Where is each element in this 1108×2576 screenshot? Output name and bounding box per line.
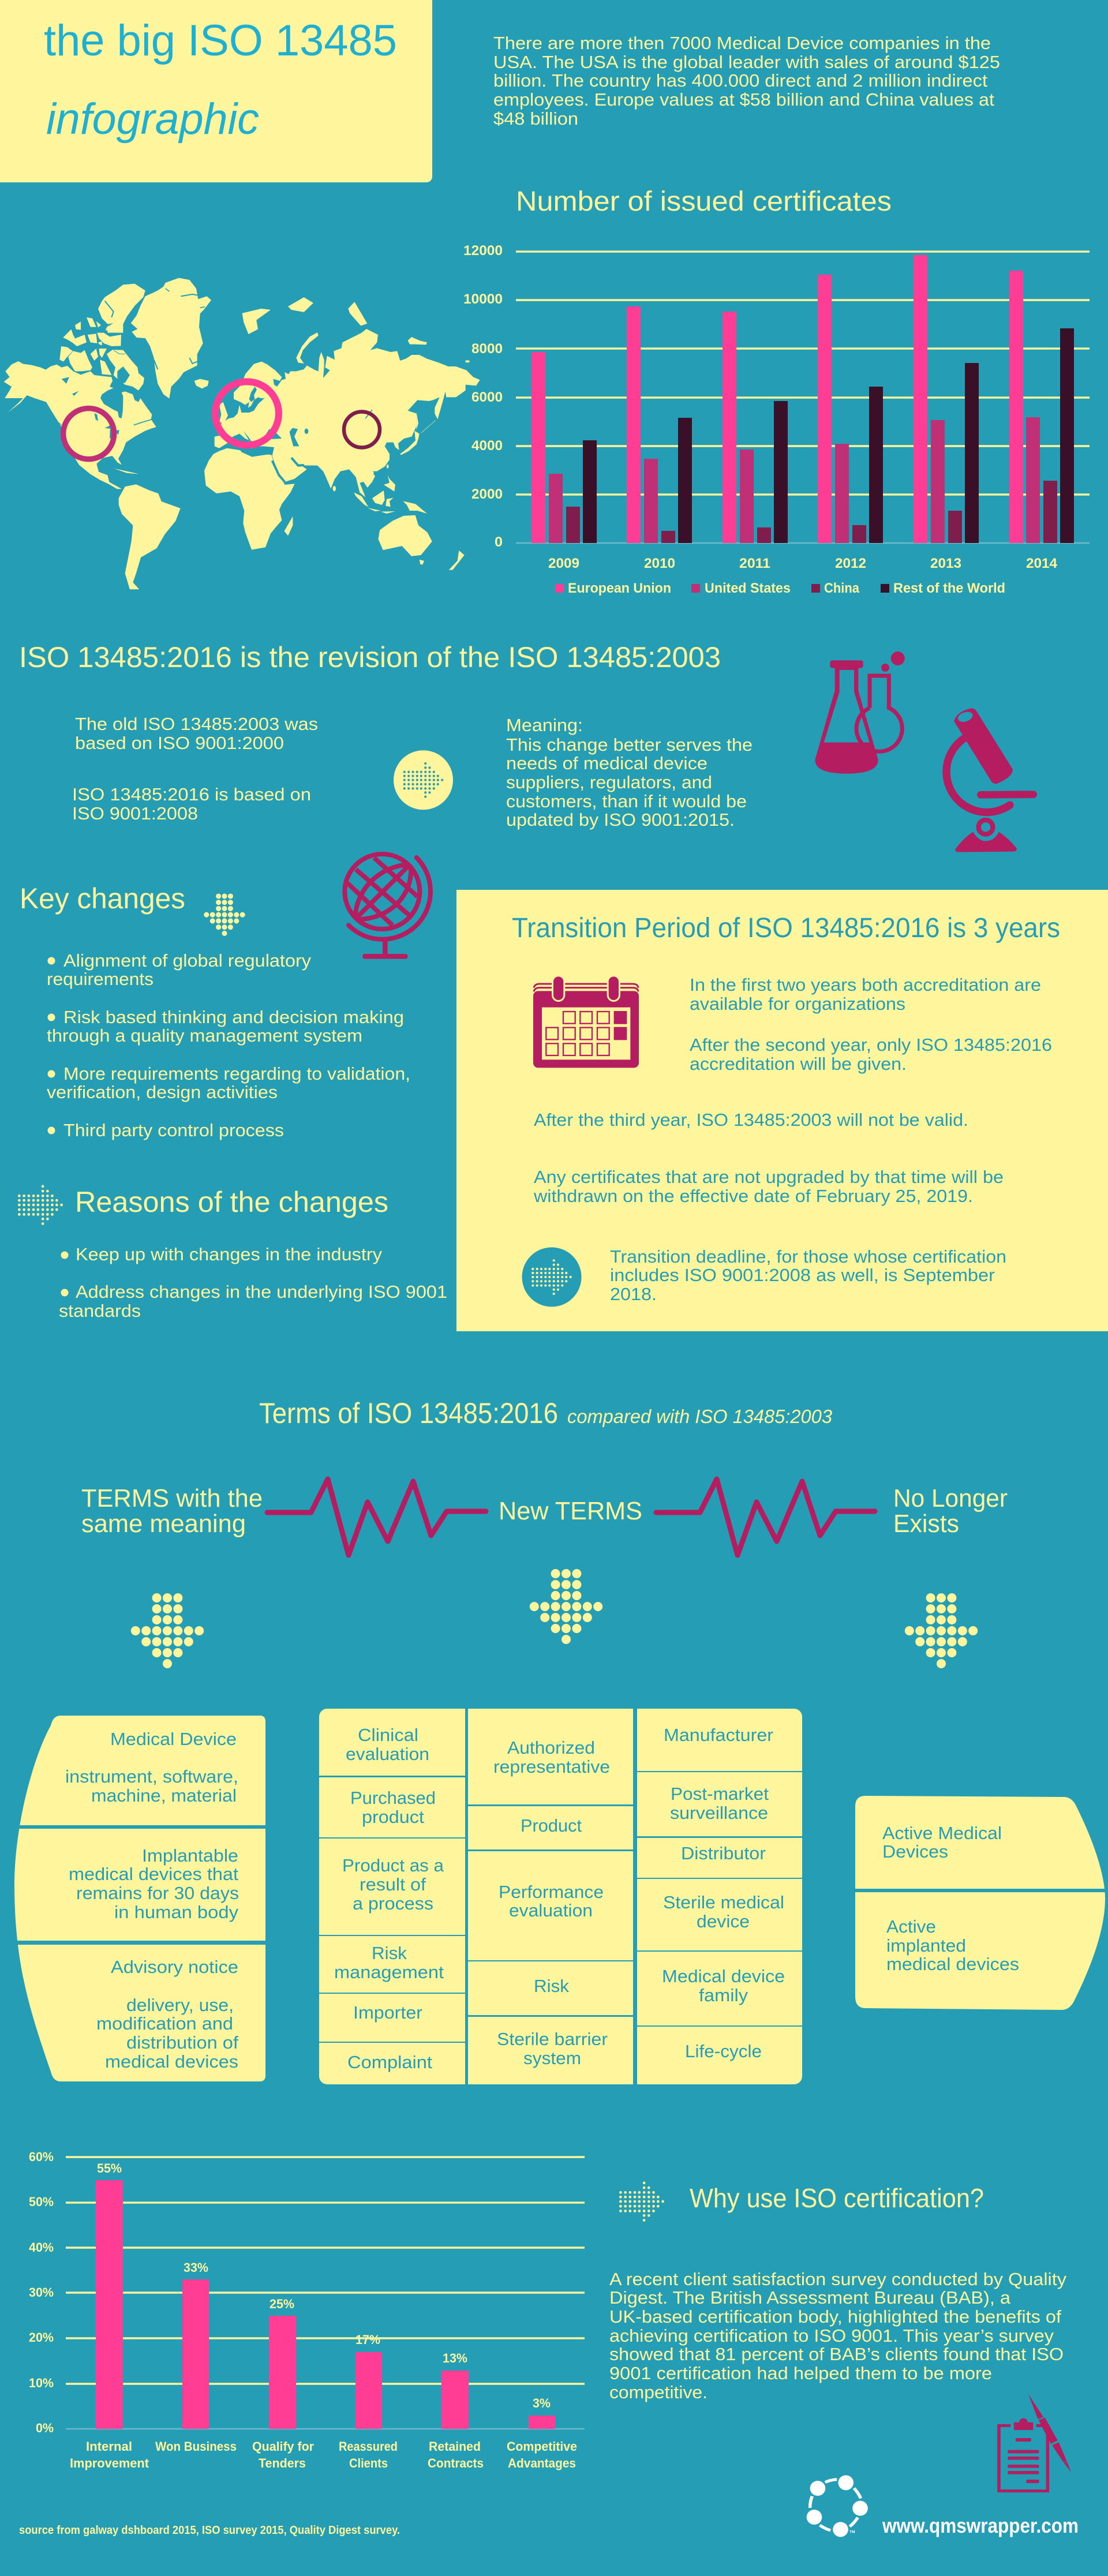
text: meaning: Meaning: [506,715,583,735]
column 1 terms: Importer [353,2002,422,2023]
column 2 terms: Product [521,1815,582,1836]
chart legend [555,581,1005,596]
column 1 terms: evaluation [346,1744,429,1764]
list: reasons [59,1244,447,1321]
bar chart: issued certificates: 2010 [644,556,675,571]
icon: dotted arrow left [131,1593,204,1668]
column 3 terms: surveillance [670,1803,768,1823]
bar chart: issued certificates: 4000 [471,438,503,454]
text: first two years: available for organizations [690,994,905,1014]
heading: revision: ISO 13485:2016 is the revision of the ISO 13485:2003 [19,641,721,673]
bar chart: why ISO certification: 13% [443,2351,467,2365]
bar chart: why ISO certification: 50% [29,2195,54,2209]
bar chart: issued certificates: 12000 [463,243,503,259]
icon: dotted right arrow [619,2182,664,2222]
bar chart: why ISO certification: Improvement [70,2456,149,2470]
panel: no longer exists terms: medical devices [886,1954,1019,1974]
panel: terms with same meaning [12,1716,268,2081]
label: terms with the same meaning: TERMS with the [81,1484,263,1512]
icon: right arrow in cream circle [394,750,453,810]
label: terms with the same meaning: same meaning [81,1510,246,1538]
bar chart: issued certificates: 0 [495,534,503,550]
bar chart: why ISO certification: 33% [184,2260,208,2275]
chart legend: Rest of the World [893,581,1005,596]
list: key changes: Alignment of global regulatory [63,950,312,971]
text: meaning: needs of medical device [506,753,708,773]
text: first two years: accreditation will be given. [690,1054,907,1074]
column 1 terms [334,1725,444,2072]
list: key changes: verification, design activities [47,1082,278,1102]
column 2 terms: Sterile barrier [497,2029,608,2049]
text: meaning [506,715,753,830]
label: no longer exists [893,1484,1008,1538]
panel: terms with same meaning: in human body [114,1902,239,1922]
column 3 terms: device [697,1911,750,1931]
bar chart: issued certificates: 8000 [471,341,503,357]
text: meaning: updated by ISO 9001:2015. [506,810,735,830]
column 2 terms: Authorized [507,1738,595,1758]
column 3 terms: Life-cycle [685,2041,762,2061]
bar chart: why ISO certification: Competitive [507,2439,577,2454]
icon: microscope [946,708,1034,852]
panel: no longer exists terms: Active [886,1916,936,1937]
bar chart: issued certificates: 10000 [463,291,503,307]
panel: no longer exists terms: Devices [882,1841,948,1862]
text: old standard: based on ISO 9001:2000 [75,733,284,753]
column 1 terms: a process [353,1893,433,1914]
chart legend: European Union [568,581,671,596]
heading: key changes: Key changes [20,882,185,915]
text: after third year: withdrawn on the effective date of February 25, 2019. [533,1186,973,1206]
panel: terms with same meaning: Implantable [142,1845,238,1866]
text: first two years: After the second year, only ISO 13485:2016 [690,1035,1052,1055]
list: key changes: through a quality management system [47,1025,362,1046]
bar chart: issued certificates: 2009 [548,556,579,571]
icon: dotted arrow middle [530,1569,602,1644]
intro paragraph: There are more then 7000 Medical Device companies in the [493,33,991,53]
heading: terms comparison: compared with ISO 13485:2003 [567,1406,833,1427]
column 1 terms: Product as a [342,1855,444,1875]
column 1 terms: result of [360,1874,426,1894]
bar chart: issued certificates: 2000 [471,486,503,502]
panel: terms with same meaning: remains for 30 days [76,1883,239,1903]
text: old standard [72,714,318,823]
text: transition deadline: Transition deadline, for those whose certification [610,1246,1006,1267]
icon: right arrow in teal circle [522,1248,582,1306]
text: survey paragraph: UK-based certification body, highlighted the benefits of [609,2307,1061,2327]
column 1 terms: Risk [372,1943,407,1963]
ring: European Union [215,381,279,445]
panel heading: Transition Period of ISO 13485:2016 is 3 years [512,913,1060,943]
bar chart: why ISO certification: 30% [29,2285,54,2300]
text: meaning: This change better serves the [506,735,753,755]
panel: terms with same meaning: medical devices [105,2051,238,2072]
world map [4,278,480,589]
label: no longer exists: Exists [893,1510,959,1538]
intro paragraph: employees. Europe values at $58 billion and China values at [493,89,994,110]
heading: terms comparison: Terms of ISO 13485:2016 [259,1397,558,1429]
bar chart: issued certificates: 2011 [739,556,770,571]
panel: terms with same meaning: medical devices that [69,1864,238,1884]
website url: www.qmswrapper.com [882,2514,1079,2537]
chart legend: United States [705,581,791,596]
label: terms with the same meaning [81,1484,263,1538]
bar chart: why ISO certification: 10% [29,2376,54,2390]
bar chart: issued certificates: 2014 [1026,556,1058,571]
pulse line left [267,1479,486,1555]
panel: terms with same meaning: modification and [96,2013,233,2034]
column 3 terms: Manufacturer [664,1725,773,1745]
chart legend: China [824,581,860,596]
list: key changes: More requirements regarding to validation, [63,1064,410,1084]
title box: infographic [46,95,259,144]
title box [0,0,432,182]
panel: terms with same meaning: delivery, use, [126,1995,234,2015]
bar chart: why ISO certification: 3% [533,2396,551,2410]
bar chart: why ISO certification: 25% [269,2297,294,2311]
list: key changes: Third party control process [63,1120,284,1140]
text: old standard: The old ISO 13485:2003 was [75,714,318,734]
column 3 terms: Sterile medical [663,1892,784,1912]
bar chart: why ISO certification: Won Business [155,2439,237,2454]
text: meaning: customers, than if it would be [506,791,747,811]
title box: the big ISO 13485 [44,16,397,65]
ring: China [344,412,380,448]
column 1 terms: Clinical [358,1725,418,1745]
text: transition deadline [610,1246,1006,1304]
bar chart: why ISO certification: 17% [355,2332,380,2347]
intro paragraph: $48 billion [493,108,578,129]
bar chart: issued certificates: 6000 [471,390,503,405]
bar chart: why ISO certification: 20% [29,2330,54,2345]
logo: ring of circles [807,2475,868,2537]
column 1 terms: product [362,1807,424,1827]
text: survey paragraph: competitive. [609,2382,708,2402]
panel: terms with same meaning: Medical Device [110,1729,237,1749]
column 2 terms: Risk [534,1976,569,1996]
pulse line right [656,1479,875,1555]
text: transition deadline: 2018. [610,1284,657,1304]
text: survey paragraph: achieving certification to ISO 9001. This year’s survey [609,2326,1054,2346]
column 3 terms: Medical device [662,1966,785,1986]
icon: flasks [815,652,905,774]
intro paragraph: billion. The country has 400.000 direct and 2 million indirect [493,70,987,91]
bar chart: why ISO certification: Advantages [508,2456,576,2470]
column 2 terms: evaluation [509,1900,593,1920]
panel: terms with same meaning: machine, material [91,1785,237,1806]
bar chart: why ISO certification: Clients [349,2456,388,2470]
bar chart: why ISO certification: Retained [429,2439,481,2454]
bar chart: why ISO certification: 60% [29,2150,54,2164]
column 2 terms: representative [493,1757,610,1777]
icon: calendar [533,975,639,1068]
text: transition deadline: includes ISO 9001:2008 as well, is September [610,1265,995,1285]
text: after third year: After the third year, ISO 13485:2003 will not be valid. [534,1110,968,1130]
bar chart: issued certificates: 2012 [835,556,866,571]
icon: dotted arrow right [905,1593,978,1668]
chart title: Number of issued certificates [516,186,892,217]
bar chart: why ISO certification: Qualify for [252,2439,314,2454]
text: survey paragraph: Digest. The British Assessment Bureau (BAB), a [609,2287,1011,2308]
panel: no longer exists terms: implanted [886,1935,966,1956]
text: after third year [533,1110,1004,1206]
bar chart: why ISO certification: 40% [29,2240,54,2255]
bar chart: why ISO certification: Tenders [259,2456,306,2470]
panel: new terms table [319,1709,802,2084]
label: new terms: New TERMS [499,1497,642,1525]
text: survey paragraph: showed that 81 percent of BAB’s clients found that ISO [609,2344,1064,2364]
text: survey paragraph: A recent client satisfaction survey conducted by Quality [609,2269,1067,2289]
list: reasons: standards [59,1301,141,1321]
text: first two years: In the first two years both accreditation are [690,975,1041,995]
logo: ring of circles: TM [849,2530,855,2534]
column 1 terms: management [334,1962,444,1982]
column 2 terms [493,1738,610,2068]
panel: terms with same meaning: Advisory notice [111,1957,238,1977]
panel: no longer exists terms [853,1796,1108,2010]
icon: globe [345,854,431,956]
text: meaning: suppliers, regulators, and [506,772,712,792]
column 3 terms: Post-market [671,1784,769,1804]
column 2 terms: system [523,2048,581,2068]
bar chart: why ISO certification: 0% [36,2421,54,2435]
column 1 terms: Complaint [347,2052,432,2072]
list: key changes: requirements [47,969,154,989]
panel: terms with same meaning: instrument, software, [65,1766,238,1787]
bar chart: why ISO certification: Contracts [428,2456,484,2470]
label: no longer exists: No Longer [893,1484,1008,1512]
text: after third year: Any certificates that are not upgraded by that time will be [534,1167,1004,1187]
icon: clipboard and pen [999,2394,1071,2491]
bar chart: issued certificates: 2013 [930,556,961,571]
bar chart: why ISO certification [29,2150,585,2470]
heading: why use ISO certification: Why use ISO certification? [690,2183,984,2213]
panel: transition period [456,890,1108,1331]
list: key changes [47,950,410,1140]
heading: reasons of the changes: Reasons of the changes [75,1186,388,1218]
bar chart: issued certificates [463,243,1090,596]
text: survey paragraph: 9001 certification had helped them to be more [609,2363,992,2383]
source note: source from galway dshboard 2015, ISO survey 2015, Quality Digest survey. [19,2524,400,2537]
column 1 terms: Purchased [350,1788,436,1808]
column 2 terms: Performance [499,1882,604,1902]
intro paragraph: USA. The USA is the global leader with sales of around $125 [493,52,1000,72]
bar chart: why ISO certification: Internal [86,2439,132,2454]
icon: dotted down arrow [204,893,245,936]
list: key changes: Risk based thinking and decision making [63,1007,404,1027]
column 3 terms: family [699,1985,748,2005]
column 3 terms [662,1725,785,2061]
text: first two years [690,975,1052,1074]
list: reasons: Keep up with changes in the industry [76,1244,383,1264]
text: old standard: ISO 13485:2016 is based on [72,784,311,804]
bar chart: why ISO certification: 55% [97,2161,122,2176]
intro paragraph [493,33,1000,129]
heading: terms comparison [259,1397,833,1429]
panel: no longer exists terms: Active Medical [882,1823,1002,1843]
text: old standard: ISO 9001:2008 [72,803,198,823]
text: survey paragraph [609,2269,1067,2402]
list: reasons: Address changes in the underlying ISO 9001 [76,1282,447,1302]
icon: dotted right arrow [18,1185,63,1225]
panel: terms with same meaning: distribution of [126,2032,238,2053]
bar chart: why ISO certification: Reassured [339,2439,398,2454]
column 3 terms: Distributor [681,1843,766,1863]
ring: United States [63,409,114,459]
